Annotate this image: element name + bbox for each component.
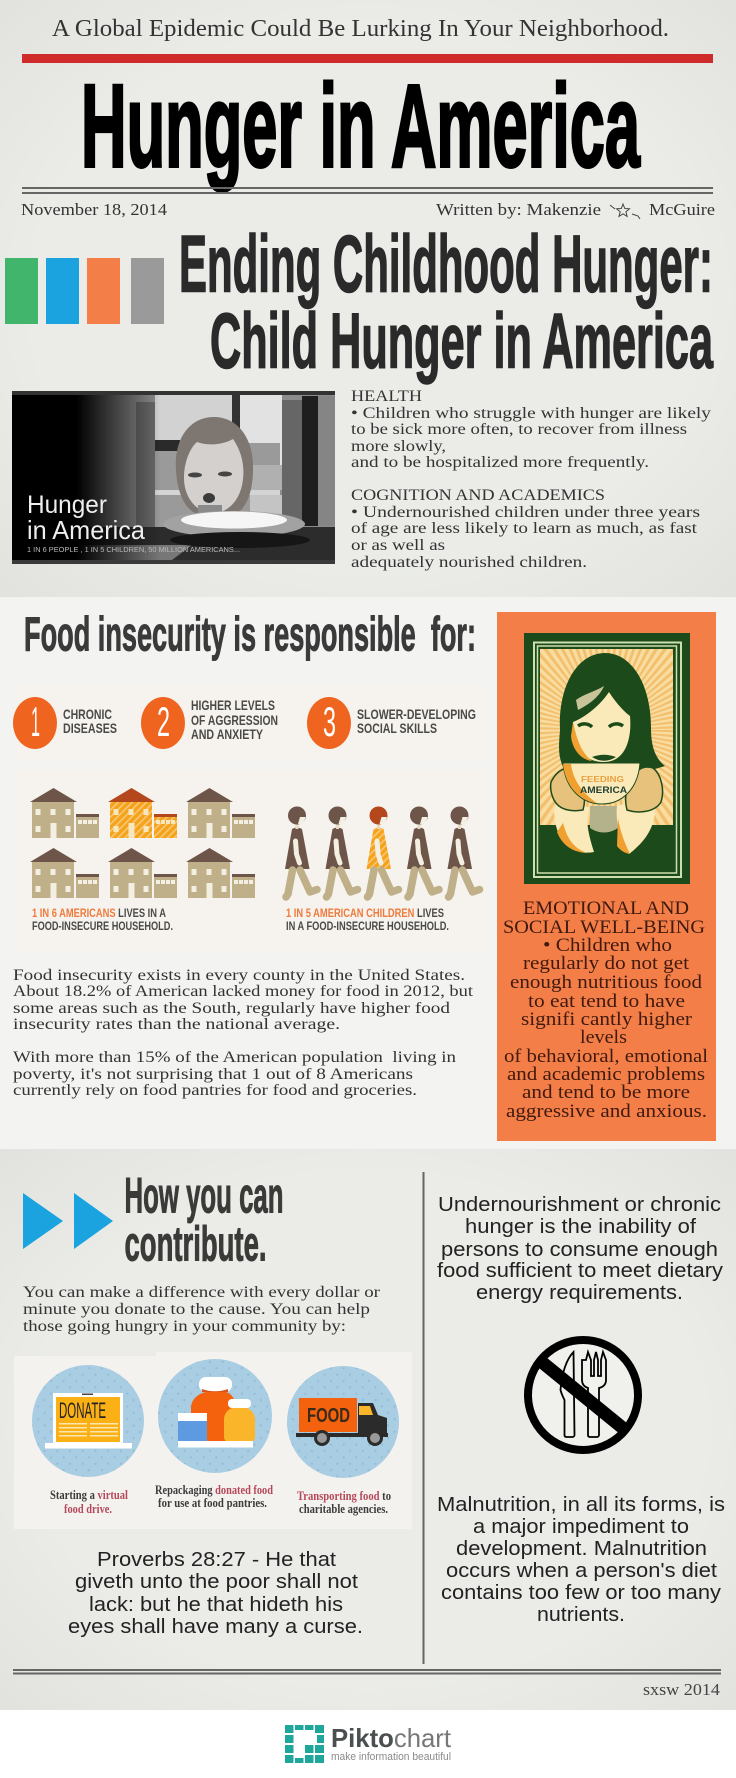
- panel: white footer: [0, 1710, 736, 1778]
- caption: repackaging donated food: for use at food pantries.: [158, 1496, 267, 1510]
- text: well-being: to eat tend to have: [528, 991, 685, 1012]
- caption: transporting food: [297, 1489, 391, 1516]
- item 3: social skills: [307, 697, 476, 749]
- text block: health and cognition: [351, 388, 711, 571]
- text block: undernourishment: energy requirements.: [476, 1282, 683, 1304]
- text block: food insecurity facts: currently rely on food pantries for food and groceries.: [13, 1082, 417, 1099]
- byline: McGuire: [649, 200, 715, 219]
- plate: [163, 511, 310, 548]
- text block: malnutrition: Malnutrition, in all its forms, is: [437, 1494, 725, 1516]
- red rule: [22, 54, 713, 63]
- text block: food insecurity facts: some areas such as the South, regularly have higher food: [13, 1000, 450, 1017]
- text block: malnutrition: occurs when a person's diet: [446, 1560, 717, 1582]
- caption: one in five children: 1 IN 5 AMERICAN CHILDREN LIVES: [286, 908, 444, 920]
- quote: proverbs: giveth unto the poor shall not: [75, 1571, 358, 1593]
- icon: food truck: FOOD: [307, 1405, 350, 1427]
- item 3: social skills: 3: [323, 698, 336, 745]
- byline: [436, 200, 715, 219]
- logo: piktochart wordmark: make information beautiful: [331, 1751, 451, 1763]
- text block: malnutrition: [437, 1494, 725, 1626]
- text: well-being: levels: [580, 1027, 627, 1048]
- panel: how you can contribute background: [0, 1149, 736, 1710]
- icon: virtual food drive laptop: DONATE: [59, 1398, 106, 1423]
- lace collar: [590, 806, 618, 832]
- photo caption: [27, 491, 240, 554]
- poster: feeding america: AMERICA: [580, 785, 627, 796]
- text: well-being: regularly do not get: [523, 953, 690, 974]
- caption: transporting food: charitable agencies.: [299, 1502, 388, 1516]
- text block: undernourishment: hunger is the inability of: [465, 1216, 696, 1238]
- panel: food insecurity background: [0, 597, 736, 1149]
- item 2: aggression and anxiety: HIGHER LEVELS: [191, 697, 275, 713]
- item 2: aggression and anxiety: AND ANXIETY: [191, 726, 263, 742]
- text block: health and cognition: • Children who struggle with hunger are likely: [351, 405, 711, 422]
- caption: one in five children: IN A FOOD-INSECURE HOUSEHOLD.: [286, 921, 449, 933]
- bowl: [563, 763, 640, 804]
- text block: food insecurity facts: Food insecurity exists in every county in the United States.: [13, 967, 465, 984]
- photo caption: in America: [27, 515, 146, 545]
- caption: one in five children: [286, 908, 449, 933]
- text block: how to help intro: those going hungry in your community by:: [23, 1318, 346, 1335]
- text: well-being: [503, 898, 708, 1122]
- text block: health and cognition: of age are less likely to learn as much, as fast: [351, 520, 698, 537]
- text block: undernourishment: Undernourishment or chronic: [438, 1194, 721, 1216]
- girl hair: [559, 653, 665, 772]
- text block: food insecurity facts: About 18.2% of American lacked money for food in 2012, but: [13, 983, 474, 1000]
- child head: [176, 417, 253, 513]
- text: well-being: and academic problems: [507, 1064, 705, 1085]
- heading: ending childhood hunger: [179, 220, 713, 384]
- panel: household and children statistics: [14, 770, 488, 953]
- item 1: chronic diseases: CHRONIC: [63, 706, 112, 722]
- text: well-being: of behavioral, emotional: [504, 1046, 708, 1067]
- caption: virtual food drive: Starting a virtual: [50, 1488, 128, 1502]
- photo: hungry child: [12, 391, 335, 564]
- text block: malnutrition: contains too few or too many: [441, 1582, 721, 1604]
- text block: undernourishment: [437, 1194, 723, 1304]
- text: well-being: and tend to be more: [522, 1082, 690, 1103]
- text block: how to help intro: [23, 1284, 381, 1335]
- item 3: social skills: SOCIAL SKILLS: [357, 720, 437, 736]
- panel: ways to contribute: [14, 1352, 412, 1529]
- text block: health and cognition: • Undernourished children under three years: [351, 504, 700, 521]
- item 3: social skills: SLOWER-DEVELOPING: [357, 706, 476, 722]
- icon: star flourish: [610, 204, 640, 219]
- text block: health and cognition: more slowly,: [351, 438, 446, 455]
- text: well-being: EMOTIONAL AND: [523, 898, 689, 919]
- quote: proverbs: [68, 1549, 363, 1638]
- quote: proverbs: lack: but he that hideth his: [89, 1594, 343, 1616]
- text block: health and cognition: adequately nourished children.: [351, 554, 587, 571]
- text block: food insecurity facts: With more than 15% of the American population living in: [13, 1049, 456, 1066]
- arms: [554, 803, 655, 854]
- icon: virtual food drive laptop: [32, 1365, 144, 1477]
- text block: food insecurity facts: [13, 967, 474, 1099]
- caption: virtual food drive: [50, 1488, 128, 1516]
- text block: how to help intro: You can make a difference with every dollar or: [23, 1284, 381, 1301]
- panel: newspaper header background: [0, 0, 736, 597]
- caption: virtual food drive: food drive.: [64, 1502, 112, 1516]
- text block: malnutrition: development. Malnutrition: [456, 1538, 707, 1560]
- photo caption: 1 IN 6 PEOPLE , 1 IN 5 CHILDREN, 50 MILLION AMERICANS...: [27, 545, 240, 554]
- text block: how to help intro: minute you donate to the cause. You can help: [23, 1301, 370, 1318]
- text block: health and cognition: COGNITION AND ACADEMICS: [351, 487, 605, 504]
- caption: transporting food: Transporting food to: [297, 1489, 391, 1503]
- icon: repackaged food jars: [158, 1359, 272, 1473]
- panel: numbered effects: [13, 686, 488, 760]
- photo caption: Hunger: [27, 491, 107, 519]
- item 2: aggression and anxiety: OF AGGRESSION: [191, 712, 278, 728]
- text block: food insecurity facts: insecurity rates than the national average.: [13, 1016, 340, 1033]
- text block: malnutrition: nutrients.: [537, 1604, 625, 1626]
- masthead double rule: [22, 187, 713, 194]
- icon: no food, crossed knife and fork: [528, 1340, 638, 1450]
- caption: repackaging donated food: Repackaging donated food: [155, 1483, 273, 1497]
- heading: how you can contribute: [124, 1168, 284, 1272]
- byline: Written by: Makenzie: [436, 200, 601, 219]
- caption: repackaging donated food: [155, 1483, 273, 1510]
- text: well-being: enough nutritious food: [510, 972, 703, 993]
- heading: how you can contribute: contribute.: [124, 1218, 266, 1272]
- icon: double arrow: [23, 1193, 113, 1249]
- item 1: chronic diseases: 1: [31, 698, 40, 745]
- caption: one in six americans: [32, 908, 173, 933]
- text block: health and cognition: or as well as: [351, 537, 445, 554]
- caption: one in six americans: 1 IN 6 AMERICANS LIVES IN A: [32, 908, 166, 920]
- logo: piktochart mark: [285, 1725, 324, 1763]
- text: well-being: signifi cantly higher: [521, 1009, 693, 1030]
- bowl label: FEEDING: [581, 775, 624, 784]
- tagline: A Global Epidemic Could Be Lurking In Your Neighborhood.: [52, 16, 669, 42]
- text: well-being: • Children who: [543, 935, 672, 956]
- girl face: [573, 692, 630, 762]
- item 2: aggression and anxiety: [141, 697, 278, 749]
- text block: undernourishment: food sufficient to meet dietary: [437, 1260, 723, 1282]
- text block: food insecurity facts: poverty, it's not surprising that 1 out of 8 Americans: [13, 1066, 413, 1083]
- text block: health and cognition: HEALTH: [351, 388, 423, 405]
- hands: [551, 767, 663, 812]
- text block: health and cognition: to be sick more often, to recover from illness: [351, 421, 687, 438]
- column divider: [422, 1172, 424, 1664]
- panel: emotional and social well-being: [497, 612, 716, 1141]
- text: well-being: SOCIAL WELL-BEING: [503, 917, 705, 938]
- footer note: sxsw 2014: [643, 1680, 721, 1699]
- icon: food truck: [287, 1366, 399, 1478]
- quote: proverbs: eyes shall have many a curse.: [68, 1616, 363, 1638]
- text block: undernourishment: persons to consume enough: [441, 1239, 718, 1261]
- quote: proverbs: Proverbs 28:27 - He that: [97, 1549, 336, 1571]
- item 1: chronic diseases: DISEASES: [63, 720, 117, 736]
- text block: malnutrition: a major impediment to: [473, 1516, 689, 1538]
- chart: houses, one in six highlighted: [30, 788, 255, 898]
- item 1: chronic diseases: [13, 697, 117, 749]
- chart: children, one in five highlighted: [285, 806, 480, 897]
- text: well-being: aggressive and anxious.: [506, 1101, 707, 1122]
- caption: one in six americans: FOOD-INSECURE HOUSEHOLD.: [32, 921, 173, 933]
- logo: piktochart wordmark: Piktochart: [331, 1723, 452, 1753]
- text block: health and cognition: and to be hospitalized more frequently.: [351, 454, 649, 471]
- poster: feeding america: [524, 633, 690, 884]
- item 2: aggression and anxiety: 2: [157, 698, 170, 745]
- footer double rule: [13, 1669, 721, 1674]
- heading: how you can contribute: How you can: [124, 1168, 284, 1224]
- colour blocks: [5, 258, 164, 324]
- dateline date: November 18, 2014: [21, 200, 168, 219]
